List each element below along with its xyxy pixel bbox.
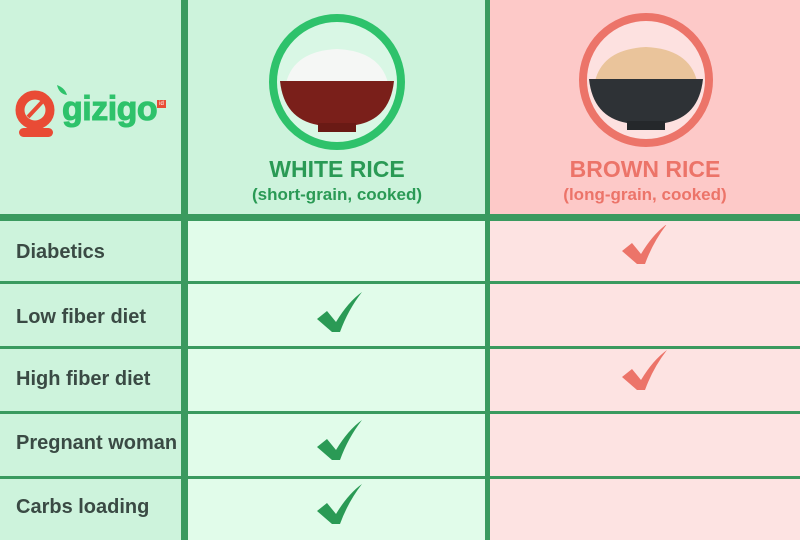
logo: gizigo [16, 85, 166, 137]
check marks [317, 225, 667, 524]
heading: white rice [252, 156, 422, 204]
heading: brown rice [563, 156, 727, 204]
row labels: Carbs loading [16, 496, 149, 518]
row labels [16, 241, 177, 518]
heading: white rice: WHITE RICE [269, 156, 405, 182]
icon: white rice bowl [269, 14, 405, 150]
row labels: Low fiber diet [16, 306, 146, 328]
row labels: Pregnant woman [16, 432, 177, 454]
heading: brown rice: BROWN RICE [570, 156, 720, 182]
logo: gizigo: gizigo [62, 90, 157, 128]
heading: white rice: (short-grain, cooked) [252, 185, 422, 204]
heading: brown rice: (long-grain, cooked) [563, 185, 727, 204]
icon: brown rice bowl [579, 13, 713, 147]
row labels: Diabetics [16, 241, 105, 263]
logo: gizigo: id [159, 101, 164, 107]
row labels: High fiber diet [16, 368, 150, 390]
